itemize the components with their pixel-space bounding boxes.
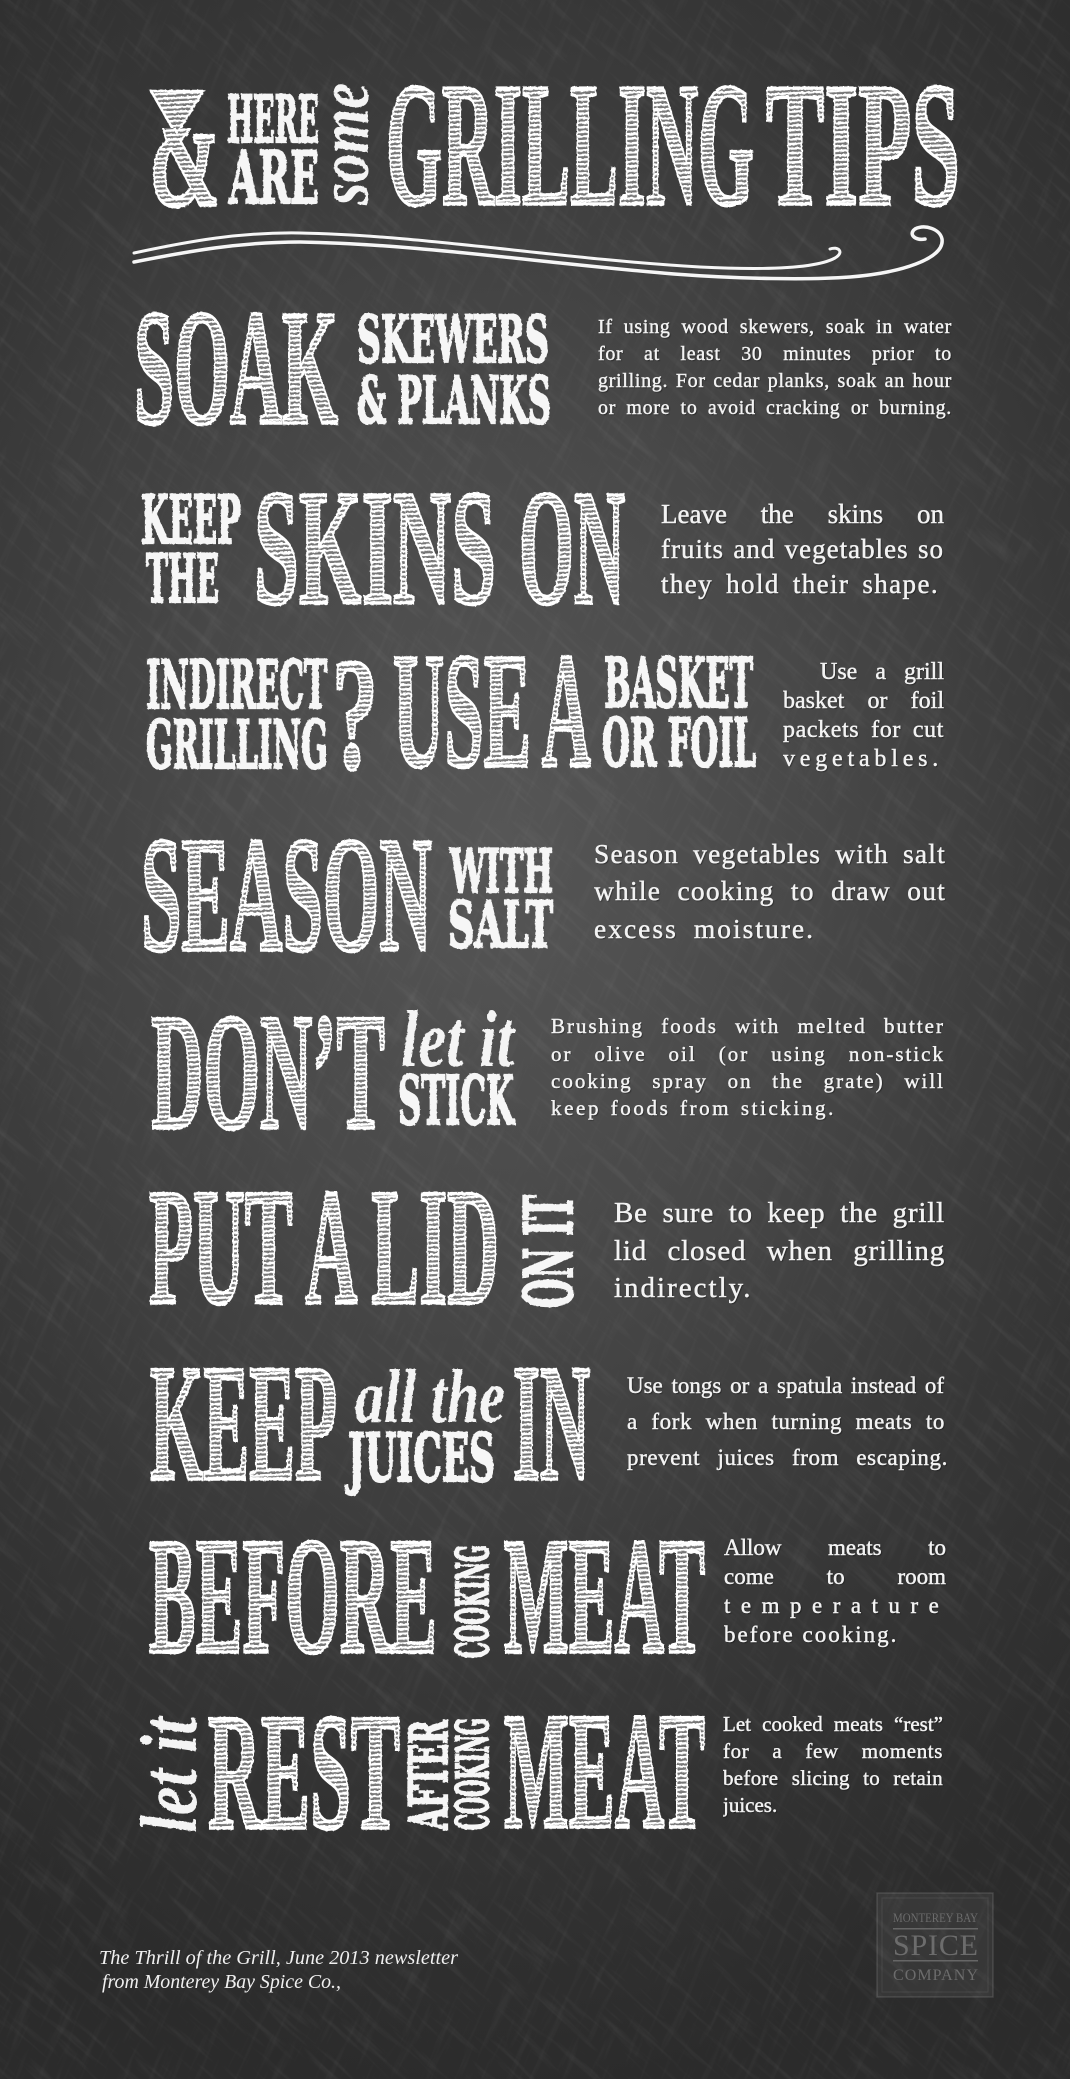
tip: soak skewers and planks: & PLANKS: [357, 363, 551, 439]
heading: basket or foil: [602, 644, 756, 782]
source credit: The Thrill of the Grill, June 2013 newsletter: [99, 1947, 458, 1969]
source credit: [99, 1947, 458, 1993]
some (rotated script): some: [304, 83, 384, 206]
title: & here are some grilling tips: HERE: [227, 82, 319, 158]
tip: indirect grilling use a basket or foil: OR FOIL: [602, 704, 756, 782]
question mark: ?: [332, 625, 378, 803]
body text: [661, 497, 946, 605]
script: all the: all the: [355, 1355, 505, 1439]
body text: keep foods from sticking.: [551, 1096, 836, 1120]
body text: Be sure to keep the grill: [614, 1197, 945, 1229]
body text: Brushing foods with melted butter: [551, 1014, 945, 1038]
heading: skewers & planks: SKEWERS: [357, 302, 549, 378]
here are: ARE: [228, 135, 319, 220]
tip: let it rest after cooking meat: REST: [208, 1680, 400, 1865]
tip: keep all the juices in: [150, 1331, 950, 1516]
heading: with salt: [448, 837, 553, 963]
tip: season with salt: SEASON: [141, 803, 432, 986]
tip: don't let it stick: STICK: [398, 1061, 515, 1140]
body text: or olive oil (or using non-stick: [551, 1042, 945, 1066]
heading: juices: JUICES: [345, 1419, 495, 1497]
body text: Leave the skins on: [661, 499, 944, 529]
body text: grilling. For cedar planks, soak an hour: [598, 370, 952, 392]
heading: use a: USE: [393, 619, 531, 802]
tip: keep all the juices in: KEEP: [150, 1331, 337, 1516]
tip: before cooking meat: BEFORE: [149, 1504, 437, 1689]
body text: [598, 314, 954, 426]
tip: don't let it stick: DON’T: [151, 980, 385, 1165]
tip: let it rest after cooking meat: COOKING: [448, 1718, 499, 1830]
body text: fruits and vegetables so: [661, 534, 944, 564]
body text: come to room: [724, 1564, 946, 1589]
body text: or more to avoid cracking or burning.: [598, 397, 952, 419]
heading: keep the: [141, 481, 241, 618]
rotated: after cooking: AFTER: [399, 1720, 460, 1831]
body text: [783, 658, 946, 776]
logo: monterey bay spice company: COMPANY: [893, 1967, 978, 1984]
body text: lid closed when grilling: [614, 1235, 945, 1267]
tip: keep the skins on: ON: [519, 456, 625, 639]
tip: soak skewers and planks: [134, 276, 954, 459]
tip: indirect grilling use a basket or foil: BASKET: [604, 644, 753, 724]
logo: monterey bay spice company: [877, 1893, 993, 1997]
body text: for a few moments: [723, 1739, 943, 1763]
title: & here are some grilling tips: &: [149, 49, 220, 244]
tip: don't let it stick: [151, 980, 947, 1165]
body text: before slicing to retain: [723, 1766, 943, 1790]
here are: [227, 82, 319, 220]
ampersand: [148, 89, 218, 209]
body text: cooking spray on the grate) will: [551, 1069, 945, 1093]
script: let it: let it: [401, 996, 516, 1084]
heading: skewers & planks: [357, 302, 551, 439]
body text: If using wood skewers, soak in water: [598, 316, 952, 338]
tip: keep the skins on: [141, 456, 946, 639]
tip: indirect grilling use a basket or foil: [146, 619, 946, 803]
tip: keep the skins on: SKINS: [254, 456, 496, 639]
heading: keep the: THE: [146, 540, 219, 618]
body text: Season vegetables with salt: [594, 838, 946, 869]
body text: prevent juices from escaping.: [627, 1445, 948, 1470]
tip: keep the skins on: KEEP: [141, 481, 241, 559]
body text: juices.: [723, 1793, 777, 1817]
tip: put a lid on it: PUT A LID: [149, 1155, 499, 1340]
logo: monterey bay spice company: SPICE: [893, 1929, 978, 1962]
logo: monterey bay spice company: MONTEREY BAY: [893, 1910, 979, 1925]
body text: [594, 835, 948, 953]
body text: packets for cut: [783, 717, 944, 743]
body text: basket or foil: [783, 688, 944, 714]
body text: a fork when turning meats to: [627, 1409, 945, 1434]
body text: indirectly.: [614, 1272, 752, 1304]
tip: indirect grilling use a basket or foil: INDIRECT: [146, 646, 327, 724]
body text: before cooking.: [724, 1622, 898, 1647]
body text: Use a grill: [820, 659, 944, 685]
body text: Use tongs or a spatula instead of: [627, 1373, 944, 1398]
body text: Let cooked meats “rest”: [723, 1712, 943, 1736]
heading: use a: [393, 619, 591, 802]
body text: Allow meats to: [724, 1535, 946, 1560]
heading: with salt: SALT: [448, 888, 553, 963]
tip: before cooking meat: MEAT: [504, 1504, 705, 1689]
rotated: after cooking: [399, 1718, 499, 1831]
rotated: on it: ON IT: [510, 1195, 588, 1308]
rotated script: let it: let it: [126, 1715, 214, 1833]
tip: indirect grilling use a basket or foil: GRILLING: [146, 706, 328, 784]
body text: temperature: [724, 1593, 948, 1618]
body text: for at least 30 minutes prior to: [598, 343, 952, 365]
body text: they hold their shape.: [661, 569, 939, 599]
flourish underline: [134, 227, 942, 279]
tip: indirect grilling use a basket or foil: A: [542, 619, 591, 802]
tip: soak skewers and planks: SOAK: [134, 276, 338, 459]
heading: indirect grilling: [146, 646, 328, 784]
tip: keep all the juices in: IN: [513, 1331, 590, 1516]
body text: while cooking to draw out: [594, 875, 946, 906]
body text: [627, 1368, 950, 1480]
body text: [551, 1013, 947, 1125]
body text: [724, 1533, 948, 1655]
body text: [614, 1195, 947, 1313]
tip: let it rest after cooking meat: [126, 1679, 945, 1865]
heading: with salt: WITH: [449, 837, 553, 907]
body text: [723, 1710, 945, 1822]
title: & here are some grilling tips: [148, 84, 958, 209]
source credit: from Monterey Bay Spice Co.,: [102, 1971, 341, 1993]
body text: vegetables.: [783, 746, 943, 772]
tip: before cooking meat: COOKING: [448, 1545, 499, 1658]
tip: let it rest after cooking meat: MEAT: [504, 1679, 705, 1864]
body text: excess moisture.: [594, 913, 815, 944]
